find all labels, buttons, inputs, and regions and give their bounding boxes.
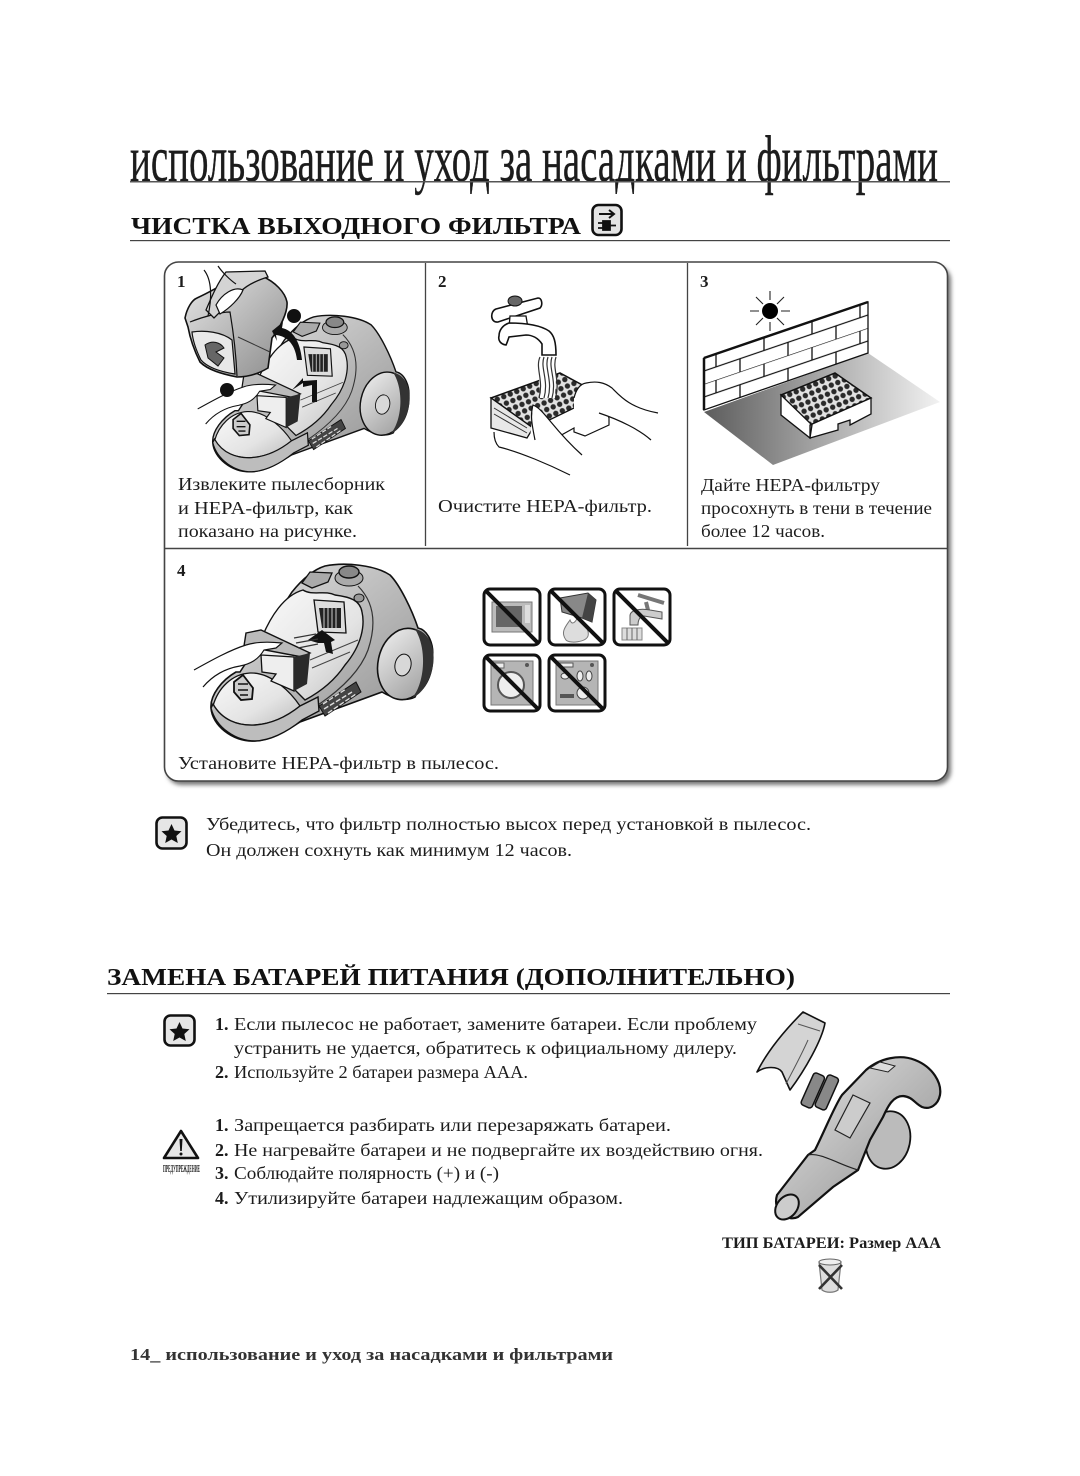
battery warnings list: Соблюдайте полярность (+) и (-) (234, 1163, 499, 1184)
caption step 1: и HEPA-фильтр, как (178, 498, 353, 518)
icon: warning triangle (163, 1131, 200, 1175)
note text: Он должен сохнуть как минимум 12 часов. (206, 840, 572, 860)
illustration: battery compartment cover (757, 1012, 825, 1090)
step 1: 1 (177, 272, 186, 291)
caption step 3 (701, 475, 932, 541)
illustration: washing filter under tap (491, 296, 658, 475)
illustration: drying filter in shade (704, 291, 940, 465)
battery warnings list: Запрещается разбирать или перезаряжать батареи. (234, 1115, 671, 1135)
panel: filter cleaning steps (164, 262, 951, 785)
icon: battery note star (164, 1016, 194, 1046)
caption step 1 (178, 474, 385, 541)
battery warnings list: 1. (215, 1115, 228, 1135)
caption step 2: Очистите HEPA-фильтр. (438, 496, 652, 516)
step 1 (177, 266, 414, 541)
icon: note star (156, 818, 186, 848)
icon: unplug (592, 205, 622, 235)
icon: do not discard in bin (819, 1259, 842, 1292)
caption step 3: более 12 часов. (701, 521, 825, 541)
battery warnings list: 2. (215, 1140, 228, 1160)
caption step 3: просохнуть в тени в течение (701, 498, 932, 518)
heading: exhaust filter cleaning: ЧИСТКА ВЫХОДНОГО ФИЛЬТРА (131, 214, 582, 240)
step 4 (177, 561, 499, 773)
icon: no fire (549, 589, 605, 645)
illustration: vacuum hose handle (770, 1057, 940, 1224)
battery warnings list: Утилизируйте батареи надлежащим образом. (234, 1188, 623, 1208)
note text: Убедитесь, что фильтр полностью высох перед установкой в пылесос. (206, 814, 811, 834)
icon: no water (614, 589, 670, 645)
icon: no dishwasher (549, 655, 605, 711)
step 3 (700, 272, 940, 541)
icon: no washing machine (484, 655, 540, 711)
battery warnings list: 4. (215, 1188, 228, 1208)
illustration: reinstalling filter (194, 564, 439, 741)
caption step 1: Извлеките пылесборник (178, 474, 385, 494)
heading: battery replacement: ЗАМЕНА БАТАРЕЙ ПИТАНИЯ (ДОПОЛНИТЕЛЬНО) (107, 965, 795, 991)
caption step 3: Дайте HEPA-фильтру (701, 475, 880, 495)
battery warnings list: 3. (215, 1163, 228, 1183)
battery notes list: устранить не удается, обратитесь к официальному дилеру. (234, 1038, 737, 1058)
icon: no microwave (484, 589, 540, 645)
battery notes list: Если пылесос не работает, замените батареи. Если проблему (234, 1014, 757, 1034)
illustration: AAA batteries (800, 1072, 839, 1111)
battery notes list: 1. (215, 1014, 228, 1034)
step 3: 3 (700, 272, 708, 291)
battery notes list (215, 1014, 757, 1082)
battery notes list: Используйте 2 батареи размера AAA. (234, 1062, 528, 1082)
step 2: 2 (438, 272, 446, 291)
text: ПРЕДУПРЕЖДЕНИЕ (163, 1163, 200, 1175)
caption step 4: Установите HEPA-фильтр в пылесос. (178, 753, 499, 773)
illustration: removing dust bin and filter (185, 266, 414, 472)
prohibition icons (484, 589, 670, 711)
battery warnings list: Не нагревайте батареи и не подвергайте их воздействию огня. (234, 1140, 763, 1160)
footer page number: 14_ использование и уход за насадками и фильтрами (130, 1345, 613, 1364)
battery notes list: 2. (215, 1062, 228, 1082)
caption step 1: показано на рисунке. (178, 521, 357, 541)
note text (206, 814, 811, 860)
step 2 (438, 272, 658, 516)
step 4: 4 (177, 561, 186, 580)
battery type label: ТИП БАТАРЕИ: Размер AAA (722, 1235, 941, 1252)
battery warnings list (215, 1115, 763, 1208)
